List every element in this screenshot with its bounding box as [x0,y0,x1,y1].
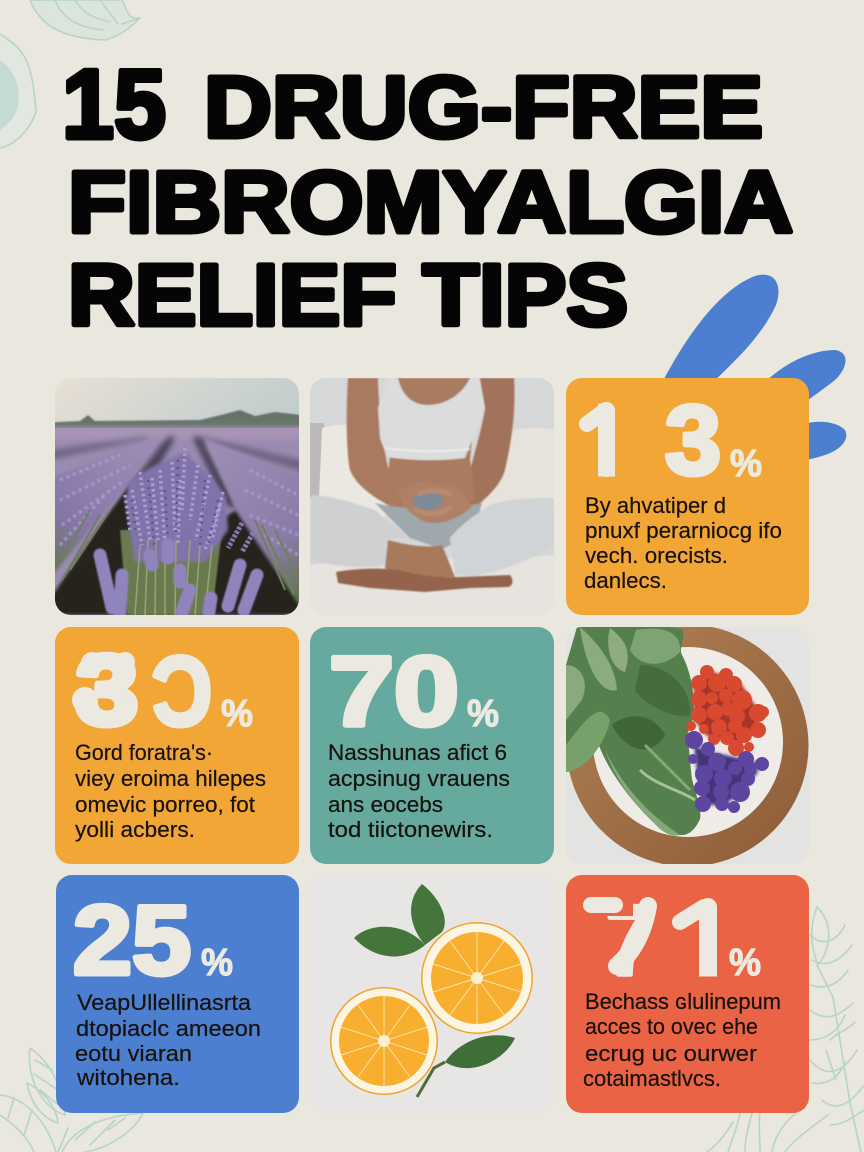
title: 15 [62,49,166,159]
berries [685,731,769,813]
panel: stat card 30% [55,627,299,864]
stat number [329,636,499,746]
card text: vech. orecists. [585,543,728,568]
panel: lavender field photo [55,378,299,615]
card text: Nasshunas afict 6 [328,740,507,765]
panel: stat card 71% [566,875,809,1113]
greens [566,624,700,836]
shorts [375,503,482,549]
card text: omevic porreo, fot [75,792,255,817]
orange slice [330,987,438,1095]
title: DRUG-FREE [204,59,763,156]
hands [406,500,472,524]
stat number [72,635,253,746]
stat number: Ɔ [152,636,212,746]
panel: stat card 13% [566,378,809,615]
torso [386,378,478,500]
stat number [591,885,761,995]
arms [346,378,406,508]
foreground lavender bush [100,448,257,615]
row shading [40,427,320,510]
card text: acces to ovec ehe [585,1014,758,1039]
title: RELIEF TIPS [68,247,628,344]
orange slice [421,922,533,1034]
decoration: top-left botanical line art [0,0,140,148]
title: FIBROMYALGIA [68,154,793,251]
card text: eotu viaran [75,1041,192,1066]
card text: danlecs. [584,568,667,593]
stat number: 25 [73,885,191,995]
stat number: 1 [576,385,622,495]
card text [75,740,266,842]
card text: acpsinug vrauens [328,766,510,791]
stat number: % [729,942,761,984]
card text [584,493,782,593]
stat number: % [730,443,762,485]
stat number [73,885,233,995]
leaves [354,884,515,1097]
legs [310,494,388,568]
stat number: 3 [76,635,138,745]
card text: Gord foratra's· [75,740,213,765]
decoration: bottom-left botanical line art [0,1048,143,1152]
panel: salad bowl photo [566,624,809,866]
card text: viey eroima hilepes [75,766,266,791]
card text: ans eocebs [328,792,443,817]
tomatoes [686,665,769,756]
stat number: 7 [606,885,654,995]
card text: By ahvatiper d [585,493,726,518]
stat number: % [221,693,253,735]
card text [328,740,510,842]
panel: meditation photo [310,378,554,615]
panel: oranges photo [330,884,533,1098]
stat number [570,385,762,495]
stat number: % [467,693,499,735]
card text: cotaimastlvcs. [583,1066,721,1091]
card text: tod tiictonewirs. [328,817,493,842]
card text [583,989,781,1091]
card text: ecrug uc ourwer [585,1041,757,1066]
decoration: blue leaf shapes [661,275,846,461]
panel: stat card 70% [310,627,554,864]
card text: dtopiaclc ameeon [76,1016,261,1041]
stat number: % [201,942,233,984]
panel: stat card 25% [56,875,299,1113]
card text: pnuxf perarniocg ifo [585,518,782,543]
stat number: 70 [329,636,459,746]
stat number: 3 [665,385,721,495]
card text: witohena. [76,1065,180,1090]
card text: Bechass ɢlulinepum [585,989,781,1014]
card text: yolli acbers. [75,817,195,842]
title [62,49,793,344]
stat number: 1 [676,885,722,995]
card text: VeapUllellinasrta [77,990,252,1015]
card text [75,990,261,1090]
decoration: bottom-right botanical line art [707,907,864,1152]
